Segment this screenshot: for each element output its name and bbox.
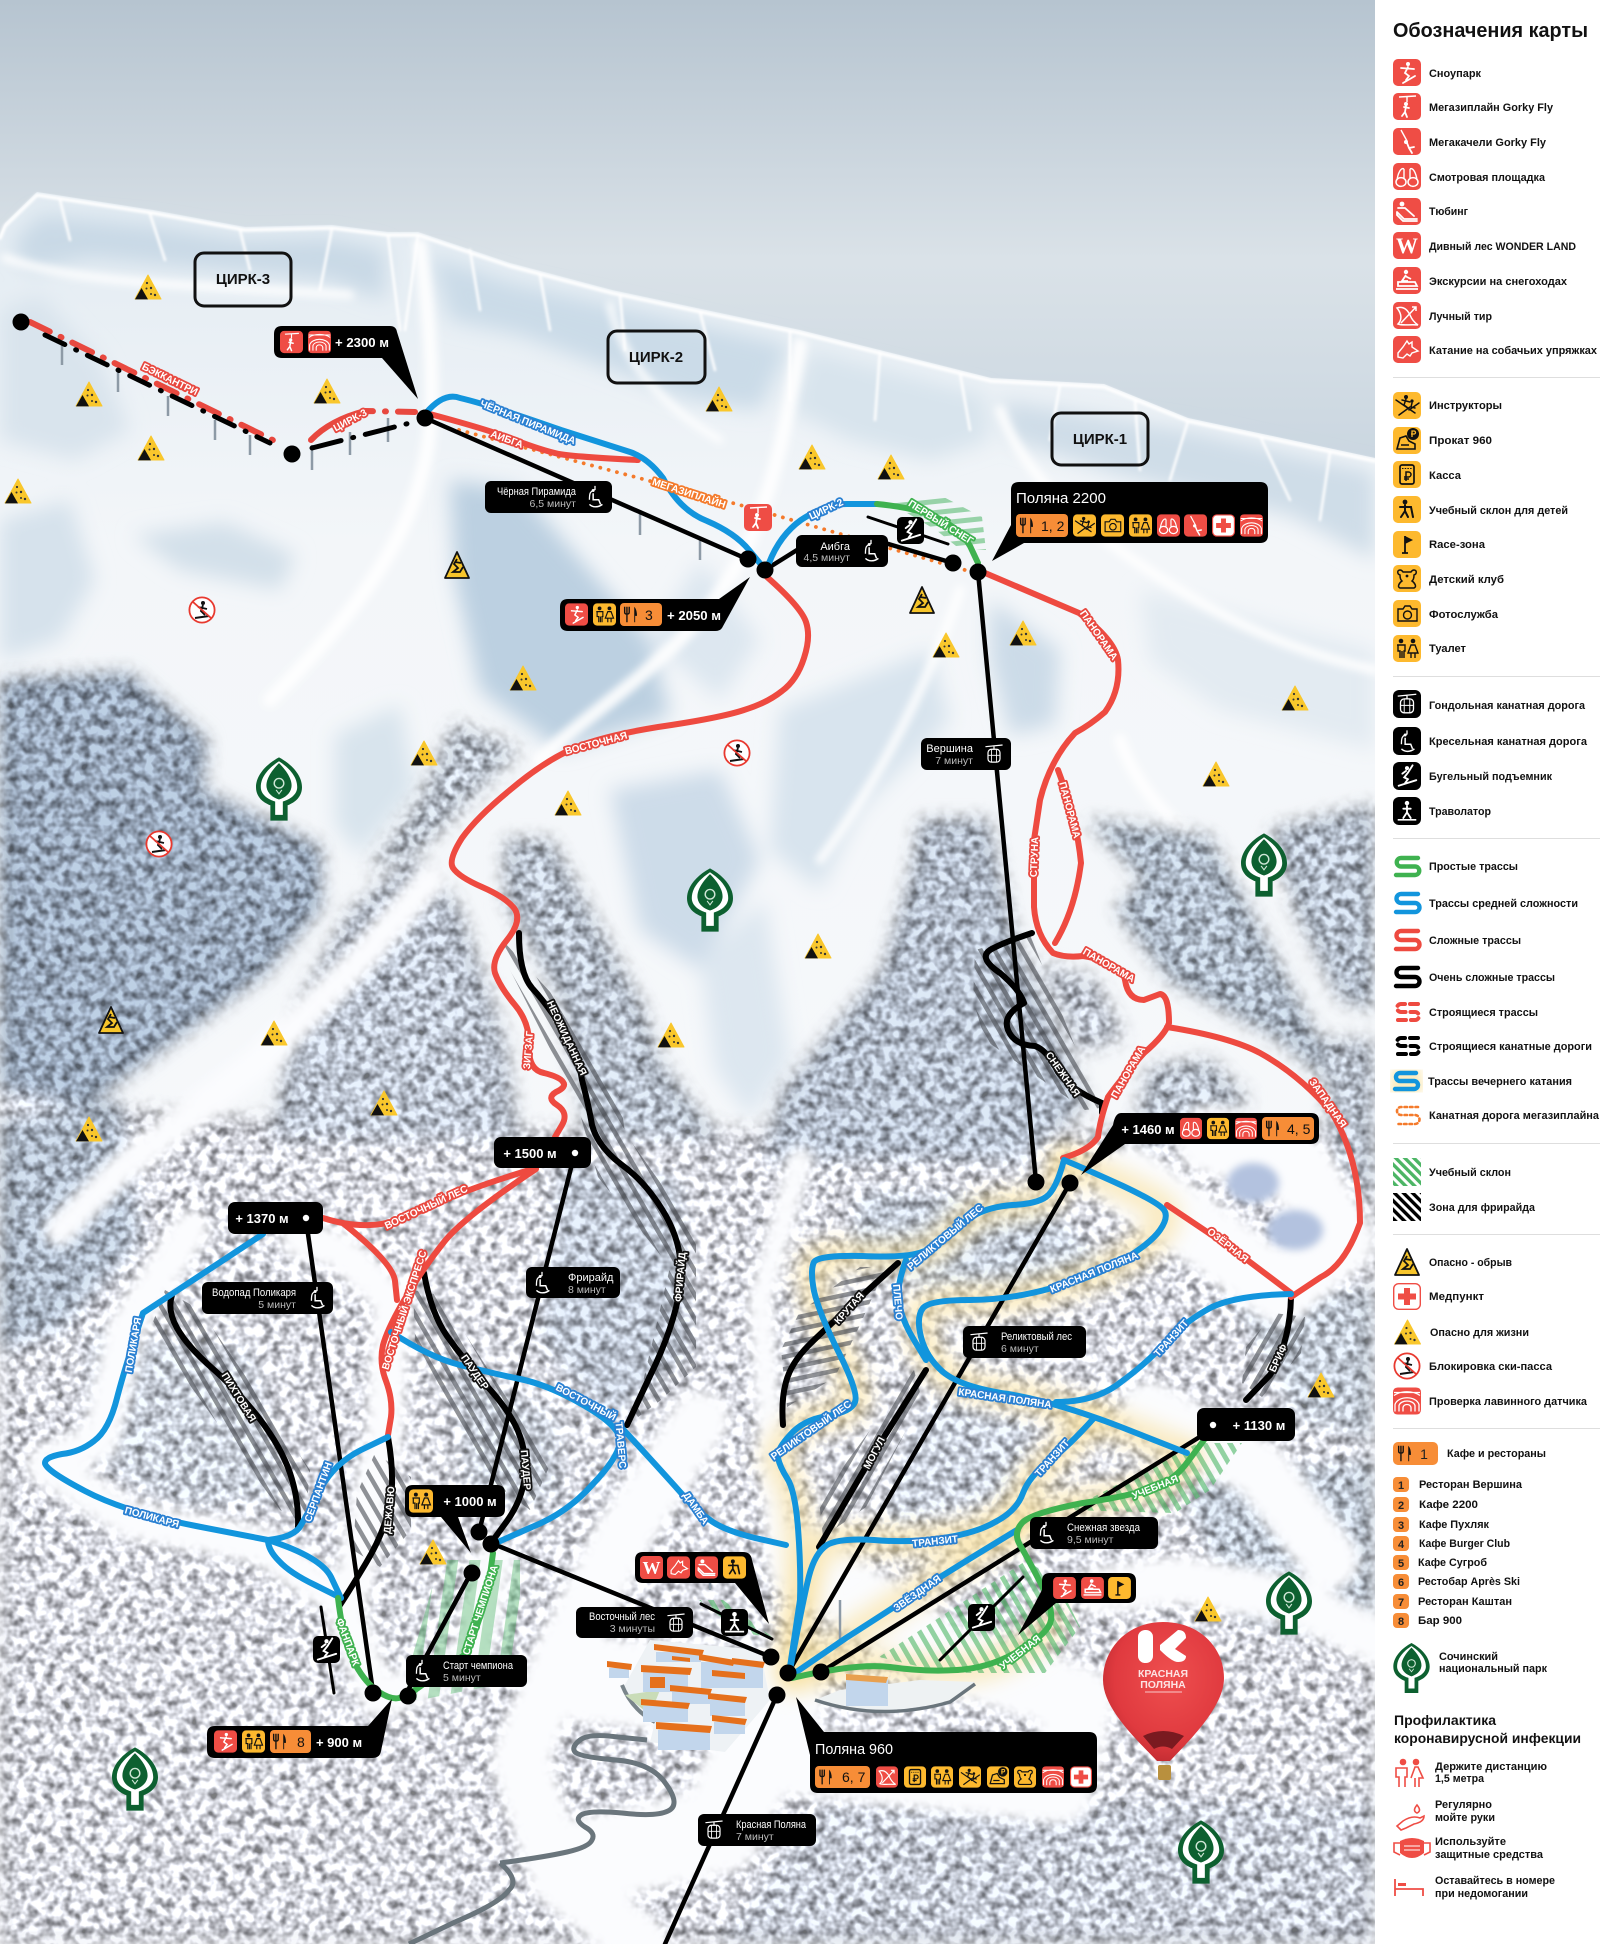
heading: coronavirus prevention (1394, 1713, 1581, 1746)
trail name labels: КРУТАЯ (833, 1291, 867, 1327)
legend group: services: Учебный склон для детей (1429, 505, 1568, 517)
lift box: Чёрная Пирамида (485, 481, 612, 513)
trail name labels: СЕРПАНТИН (303, 1461, 335, 1524)
lift box: Восточный лес: Восточный лес (589, 1611, 655, 1623)
legend group: services: Касса (1429, 470, 1462, 482)
trail name labels: ПАНОРАМА (1081, 947, 1136, 985)
prevention item: stay in room (1395, 1875, 1555, 1900)
snow clearings between forest (45, 880, 1375, 1944)
trail name labels: ФРИРАЙД (671, 1252, 689, 1302)
trail name labels: НЕОЖИДАННАЯ (544, 999, 588, 1077)
hot-air balloon: КРАСНАЯ (1138, 1668, 1188, 1680)
lift box: Старт чемпиона: Старт чемпиона (443, 1660, 514, 1672)
trail name labels: УЧЕБНАЯ (998, 1633, 1043, 1672)
lift box: Вершина: Вершина (926, 743, 974, 755)
ridge crest with snow drips (0, 195, 1375, 520)
prevention item: stay in room: Оставайтесь в номере (1435, 1875, 1555, 1887)
trail name labels: ПАНОРАМА (1056, 781, 1082, 840)
lift box: Красная Поляна: Красная Поляна (736, 1819, 807, 1831)
trail name labels: ЗИГЗАГ (522, 1030, 536, 1070)
forest areas (0, 673, 1375, 1944)
legend group: cafes and restaurants: Ресторан Вершина (1419, 1479, 1523, 1491)
trail name labels: ПОЛИКАРЯ (124, 1317, 144, 1374)
trail name labels: ДЕЖАВЮ (382, 1486, 398, 1534)
legend group: cafes and restaurants: Бар 900 (1418, 1615, 1462, 1627)
trail name labels: БРИФ (1268, 1342, 1290, 1374)
glow: evening skiing trails (778, 1160, 1189, 1678)
heading: coronavirus prevention: коронавирусной инфекции (1394, 1731, 1581, 1746)
legend group: cafes and restaurants: 1 (1398, 1480, 1404, 1492)
prevention item: wash hands: Регулярно (1435, 1799, 1492, 1811)
legend group: safety (1393, 1249, 1588, 1414)
callout: Поляна 2200 (992, 482, 1268, 561)
mountain highlights: white snow ridges (5, 245, 1375, 900)
lift box: Аибга: Аибга (820, 541, 851, 553)
legend group: activities: Мегазиплайн Gorky Fly (1429, 102, 1554, 114)
legend item: Sochi national park: Сочинский (1439, 1651, 1498, 1663)
lift box: Реликтовый лес: Реликтовый лес (1001, 1331, 1072, 1343)
prevention item: distance: Держите дистанцию (1435, 1761, 1547, 1773)
trail name labels: ТРАНЗИТ (912, 1534, 959, 1550)
callout: Wonder Land group (635, 1552, 769, 1624)
legend group: cafes and restaurants: 2 (1398, 1500, 1404, 1512)
callout: snowpark group near Учебная (1018, 1573, 1136, 1635)
legend group: cafes and restaurants: 4 (1398, 1539, 1405, 1551)
legend group: services: Фотослужба (1429, 609, 1499, 621)
cirque label: ЦИРК-2: ЦИРК-2 (629, 349, 683, 366)
trail name labels: МЕГАЗИПЛАЙН (651, 475, 727, 511)
trail name labels: ТРАНЗИТ (1152, 1318, 1191, 1359)
zipline icon on map (744, 504, 772, 531)
callout: +2300 м: + 2300 м (335, 335, 389, 350)
callout: +900 м: + 900 м (316, 1735, 362, 1750)
legend group: services: Race-зона (1429, 539, 1486, 551)
trail name labels: КРАСНАЯ ПОЛЯНА (1049, 1250, 1140, 1296)
legend group: trail types (1395, 858, 1420, 1124)
legend group: safety: Медпункт (1429, 1291, 1485, 1303)
lift box: Фрирайд: Фрирайд (568, 1272, 614, 1284)
legend text: trail types: Простые трассы (1429, 861, 1518, 873)
lift box: Аибга (796, 535, 888, 567)
prevention item: wash hands (1397, 1799, 1495, 1830)
legend text: trail types: Строящиеся трассы (1429, 1007, 1538, 1019)
callout: +1460 м: 4, 5 (1287, 1121, 1311, 1137)
prevention item: protective mask: Используйте (1435, 1836, 1506, 1848)
elevation label: +1500 м (494, 1137, 591, 1168)
legend group: slope zones: Учебный склон (1429, 1167, 1511, 1179)
prevention item: stay in room: при недомогании (1435, 1888, 1528, 1900)
lift box: Красная Поляна: 7 минут (736, 1831, 774, 1843)
trail name labels: ПАНОРАМА (1077, 609, 1119, 662)
trail name labels: ПИХТОВАЯ (219, 1371, 258, 1424)
legend group: cafes and restaurants: 6 (1398, 1577, 1404, 1589)
prevention item: wash hands: мойте руки (1435, 1812, 1495, 1824)
cirque label: ЦИРК-1: ЦИРК-1 (1073, 431, 1127, 448)
lift box: Чёрная Пирамида: 6,5 минут (530, 498, 576, 510)
legend group: safety: Блокировка ски-пасса (1429, 1361, 1553, 1373)
callout: +2050 м (560, 577, 750, 631)
trail name labels: РЕЛИКТОВЫЙ ЛЕС (768, 1397, 854, 1463)
legend group: activities: Смотровая площадка (1429, 172, 1546, 184)
legend group: cafes and restaurants: Кафе и рестораны (1447, 1448, 1546, 1460)
prevention item: protective mask (1394, 1836, 1544, 1861)
legend text: trail types: Канатная дорога мегазиплайна (1429, 1110, 1600, 1122)
trail name labels: ВОСТОЧНЫЙ ЭКСПРЕСС (379, 1249, 429, 1371)
green runs (338, 504, 1204, 1698)
mountain shading: cirques and shadow faces (0, 215, 1375, 1120)
lift box: Водопад Поликаря: Водопад Поликаря (212, 1287, 296, 1299)
legend group: lifts: Бугельный подъемник (1429, 771, 1552, 783)
callout: Поляна 960: 6, 7 (842, 1769, 866, 1785)
trail name labels: АИБГА (489, 429, 524, 451)
legend group: lifts: Гондольная канатная дорога (1429, 700, 1586, 712)
trail name labels: ФАНПАРК (333, 1617, 361, 1669)
legend group: lifts: Кресельная канатная дорога (1429, 736, 1588, 748)
legend text: trail types: Строящиеся канатные дороги (1429, 1041, 1592, 1053)
lift box: Вершина: 7 минут (935, 755, 973, 767)
cirque label: ЦИРК-3 (195, 253, 291, 306)
callout: +1000 м: + 1000 м (443, 1494, 497, 1509)
prevention item: distance: 1,5 метра (1435, 1773, 1485, 1785)
lift box: Фрирайд: 8 минут (568, 1284, 606, 1296)
elevation label: +1370 м: + 1370 м (235, 1211, 289, 1226)
elevation label: +1130 м (1197, 1408, 1295, 1441)
blue runs (45, 397, 1291, 1675)
legend text: trail types (1428, 861, 1600, 1122)
lift box: Водопад Поликаря (202, 1282, 333, 1314)
legend group: cafes and restaurants: 3 (1398, 1520, 1404, 1532)
lift box: Снежная звезда: Снежная звезда (1067, 1522, 1141, 1534)
legend group: cafes and restaurants: 5 (1398, 1558, 1404, 1570)
legend group: services: Детский клуб (1429, 574, 1504, 586)
background: snow mountain base (0, 192, 1375, 1944)
panel: legend sidebar (1375, 0, 1600, 1944)
legend group: services: Туалет (1429, 643, 1467, 655)
trail name labels: ТРАВЕРС (612, 1421, 628, 1469)
trail name labels: БЭККАНТРИ (140, 362, 199, 398)
legend group: cafes and restaurants: Кафе 2200 (1419, 1499, 1478, 1511)
legend group: activities: Тюбинг (1429, 206, 1468, 218)
legend group: activities (1393, 59, 1598, 363)
Sochi national park logos (112, 757, 1312, 1884)
legend group: slope zones (1393, 1158, 1536, 1221)
legend group: cafes and restaurants: Кафе Burger Club (1419, 1538, 1510, 1550)
trail name labels: ЗАПАДНАЯ (1306, 1077, 1348, 1130)
legend group: activities: W (1396, 233, 1418, 258)
hazard markers: rockfall (5, 275, 1334, 1621)
cirque label: ЦИРК-2 (608, 331, 705, 383)
legend group: activities: Экскурсии на снегоходах (1429, 276, 1568, 288)
trail name labels: ПАУДЕР (458, 1353, 490, 1392)
legend group: lifts: Траволатор (1429, 806, 1491, 818)
legend heading: Обозначения карты (1393, 20, 1588, 42)
legend group: cafes and restaurants: Кафе Сугроб (1418, 1557, 1487, 1569)
legend item: Sochi national park: национальный парк (1439, 1663, 1547, 1675)
callout: +900 м (207, 1699, 392, 1758)
background: sky (0, 0, 1375, 520)
legend text: trail types: Сложные трассы (1429, 935, 1521, 947)
trail name labels: ДАМБА (680, 1490, 710, 1527)
T-bar icon: Первый снег (897, 517, 924, 544)
lift box: Красная Поляна (698, 1814, 816, 1846)
lift stations (12, 314, 1078, 1704)
prevention item: protective mask: защитные средства (1435, 1849, 1544, 1861)
callout: +2300 м (274, 326, 418, 399)
trail name labels: ПЕРВЫЙ СНЕГ (906, 497, 976, 547)
lift box: Фрирайд (526, 1267, 620, 1298)
legend group: services: Прокат 960 (1429, 435, 1492, 447)
callout: +1460 м: + 1460 м (1121, 1122, 1175, 1137)
callout: +1000 м (405, 1485, 505, 1553)
callout: Wonder Land group: W (642, 1558, 660, 1578)
trail name labels: ТРАНЗИТ (1033, 1438, 1072, 1479)
lift box: Снежная звезда: 9,5 минут (1067, 1534, 1114, 1546)
village: Polyana 960 buildings and road (409, 1640, 975, 1944)
legend group: safety: Проверка лавинного датчика (1429, 1396, 1588, 1408)
trail name labels: ВОСТОЧНАЯ (564, 730, 629, 758)
trail name labels: УЧЕБНАЯ (1131, 1474, 1180, 1502)
legend text: trail types: Трассы средней сложности (1429, 898, 1578, 910)
mega zipline dotted route (459, 430, 965, 570)
elevation label: +1500 м: + 1500 м (503, 1146, 557, 1161)
lift box: Вершина (921, 738, 1011, 770)
trail name labels: ПАНОРАМА (1110, 1045, 1148, 1100)
trail name labels: ВОСТОЧНЫЙ ЛЕС (382, 1182, 470, 1232)
legend group: activities: Мегакачели Gorky Fly (1429, 137, 1547, 149)
legend group: safety: Опасно - обрыв (1429, 1257, 1512, 1269)
elevation label: +1370 м (228, 1202, 323, 1234)
elevation label: +1130 м: + 1130 м (1233, 1418, 1285, 1433)
lift box: Восточный лес (576, 1607, 693, 1638)
lift box: Аибга: 4,5 минут (804, 552, 850, 564)
legend group: cafes and restaurants: Рестобар Après Ski (1418, 1576, 1520, 1588)
legend group: activities: Катание на собачьих упряжках (1429, 345, 1598, 357)
backcountry trail under construction (30, 322, 415, 448)
legend group: cafes and restaurants: 7 (1398, 1597, 1404, 1609)
lift box: Восточный лес: 3 минуты (610, 1623, 655, 1635)
trail name labels: ЦИРК-3 (332, 407, 369, 434)
legend text: trail types: Трассы вечернего катания (1428, 1076, 1572, 1088)
cirque label: ЦИРК-3: ЦИРК-3 (216, 271, 270, 288)
legend group: activities: Дивный лес WONDER LAND (1429, 241, 1576, 253)
trail name labels: ЧЁРНАЯ ПИРАМИДА (478, 397, 578, 447)
callout: +2050 м: + 2050 м (667, 608, 721, 623)
trail name labels: ПАУДЕР (518, 1450, 532, 1491)
callout: Поляна 960 (796, 1697, 1097, 1793)
travolator icon on map (721, 1609, 748, 1636)
trail name labels: МОГУЛ (862, 1436, 888, 1471)
legend group: cafes and restaurants: 1 (1420, 1446, 1428, 1462)
callout: +2050 м: 3 (645, 607, 653, 623)
trail name labels: ВОСТОЧНЫЙ (554, 1381, 618, 1423)
legend item: Sochi national park (1393, 1643, 1547, 1693)
T-bar icon: Фанпарк (313, 1636, 340, 1663)
trail name labels: СНЕЖНАЯ (1043, 1050, 1082, 1099)
legend group: slope zones: Зона для фрирайда (1429, 1202, 1536, 1214)
lift box: Реликтовый лес (963, 1326, 1086, 1358)
trail name labels (123, 362, 1348, 1672)
cirque label: ЦИРК-1 (1052, 413, 1148, 465)
hot-air balloon: ПОЛЯНА (1140, 1679, 1186, 1691)
legend group: services: Инструкторы (1429, 400, 1502, 412)
trail name labels: ЦИРК-2 (808, 497, 846, 523)
heading: coronavirus prevention: Профилактика (1394, 1713, 1497, 1728)
callout: +900 м: 8 (297, 1734, 305, 1750)
lift box: Водопад Поликаря: 5 минут (258, 1299, 296, 1311)
lift pylons (62, 345, 840, 1640)
legend group: safety: Опасно для жизни (1430, 1327, 1529, 1339)
lift box: Снежная звезда (1030, 1517, 1158, 1549)
legend group: cafes and restaurants: Ресторан Каштан (1418, 1596, 1512, 1608)
trail name labels: СТАРТ ЧЕМПИОНА (461, 1564, 501, 1657)
trail name labels: ЗВЁЗДНАЯ (891, 1572, 943, 1614)
trail name labels: КРАСНАЯ ПОЛЯНА (958, 1387, 1052, 1411)
trail name labels: РЕЛИКТОВЫЙ ЛЕС (904, 1201, 986, 1273)
hatch zones: freeride and training slopes (150, 493, 1305, 1700)
callout: Поляна 2200: Поляна 2200 (1016, 490, 1106, 507)
legend group: activities: Сноупарк (1429, 68, 1481, 80)
trail name labels: ПОЛИКАРЯ (123, 1505, 180, 1531)
legend group: lifts (1393, 690, 1588, 825)
lake shapes near Озёрная (1227, 1163, 1323, 1250)
lift box: Старт чемпиона: 5 минут (443, 1672, 481, 1684)
trail name labels: ПЛЕЧО (890, 1284, 904, 1321)
legend group: activities: Лучный тир (1429, 311, 1492, 323)
callout: Поляна 960: Поляна 960 (815, 1741, 893, 1758)
legend group: cafes and restaurants (1393, 1442, 1546, 1628)
trail name labels: ОЗЁРНАЯ (1205, 1225, 1251, 1265)
trail name labels: СТРУНА (1029, 837, 1041, 877)
callout: +1460 м (1081, 1113, 1319, 1175)
hazard markers: cliff (99, 552, 934, 1033)
legend group: cafes and restaurants: Кафе Пухляк (1419, 1519, 1489, 1531)
lift box: Чёрная Пирамида: Чёрная Пирамида (497, 486, 577, 498)
lift box: Реликтовый лес: 6 минут (1001, 1343, 1039, 1355)
ski lifts (308, 418, 1198, 1944)
T-bar icon: Учебная (968, 1604, 995, 1631)
callout: Поляна 2200: 1, 2 (1041, 518, 1065, 534)
legend group: services (1393, 392, 1568, 662)
black runs (170, 933, 1291, 1605)
lift box: Старт чемпиона (406, 1655, 527, 1687)
prevention item: distance (1396, 1760, 1547, 1787)
legend group: cafes and restaurants: 8 (1398, 1616, 1404, 1628)
ski-pass block markers (146, 597, 750, 857)
hot-air balloon (1103, 1622, 1224, 1780)
legend text: trail types: Очень сложные трассы (1429, 972, 1555, 984)
red runs (323, 413, 1360, 1435)
